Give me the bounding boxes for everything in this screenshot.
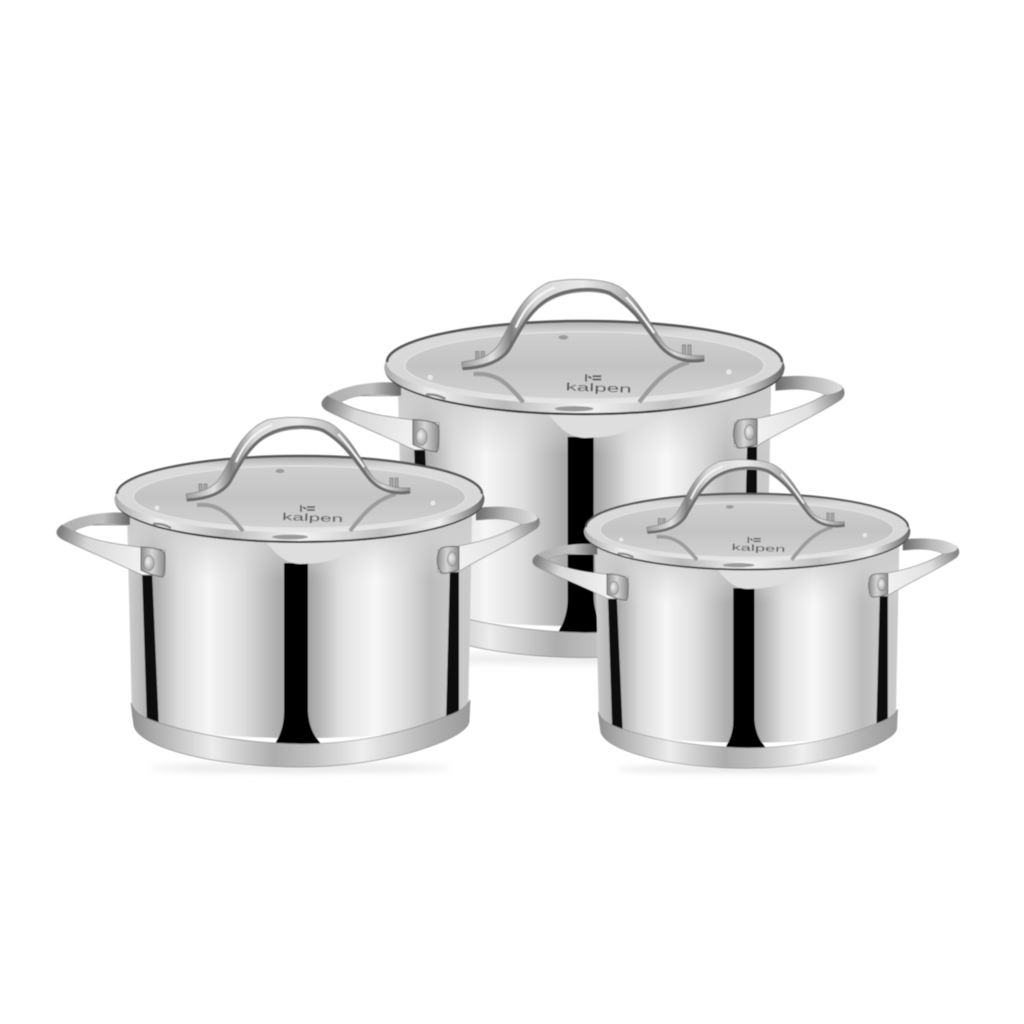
pot body (595, 543, 899, 750)
left side handle (322, 382, 439, 452)
brand name: kalpen (282, 510, 343, 525)
glass lid (114, 456, 484, 543)
right side handle (437, 507, 540, 573)
base band (402, 585, 769, 658)
brand name: kalpen (565, 380, 632, 395)
logo mark (586, 374, 601, 382)
logo mark (301, 505, 315, 512)
pot: medium left pot (57, 417, 540, 771)
glass lid (384, 321, 785, 415)
lid handle (647, 460, 845, 533)
base band (598, 709, 898, 768)
pot body (127, 512, 472, 746)
left side handle (57, 512, 165, 577)
base band (131, 700, 470, 767)
pot body (398, 382, 771, 635)
pot: large back pot (322, 279, 844, 662)
right side handle (734, 376, 844, 448)
left side handle (533, 544, 628, 600)
right side handle (869, 538, 959, 597)
glass lid (584, 493, 910, 570)
logo mark (748, 537, 761, 543)
brand name: kalpen (731, 543, 786, 554)
lid handle (462, 279, 704, 370)
lid handle (186, 417, 410, 501)
pot: small right pot (533, 460, 959, 772)
